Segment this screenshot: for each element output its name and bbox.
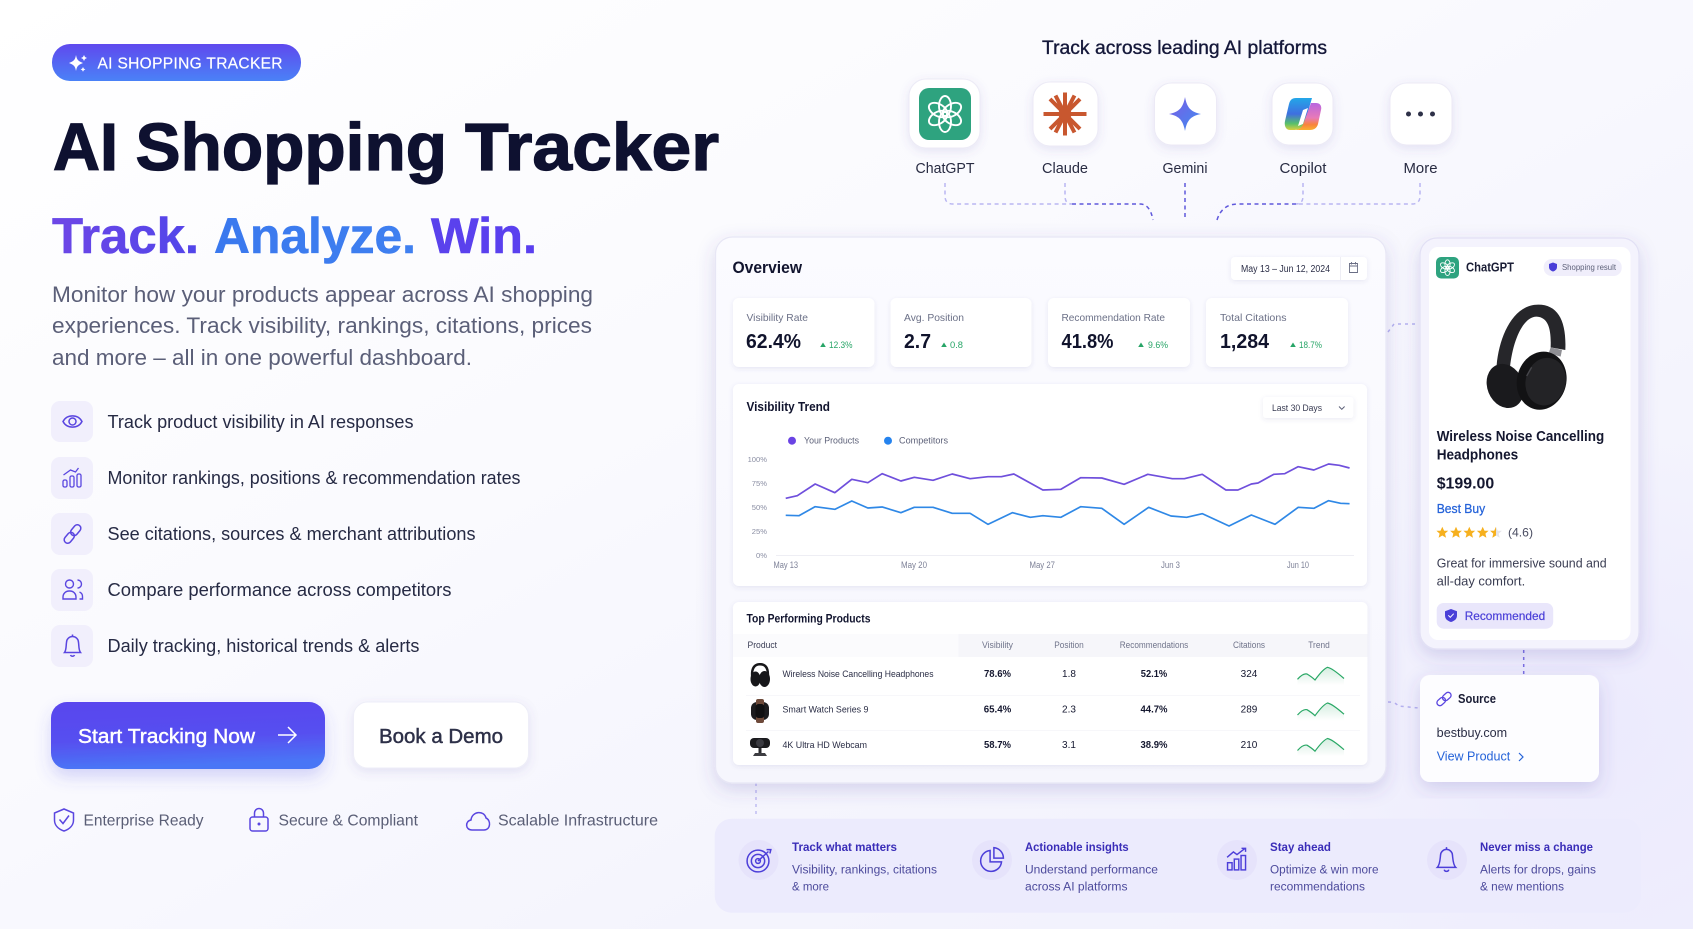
- subtitle: Track. Analyze. Win.: [52, 208, 537, 264]
- row: smart watch: 65.4%: [984, 705, 1011, 716]
- title: AI: [53, 110, 118, 185]
- icon: Gemini: [1154, 83, 1216, 177]
- button: start tracking now: [51, 702, 325, 769]
- KPI: recommendation rate: Recommendation Rate: [1062, 312, 1165, 324]
- icon: More: [1390, 83, 1452, 177]
- button: book a demo: [354, 702, 528, 768]
- badge: recommended: [1437, 603, 1553, 629]
- KPI: average position: 0.8: [950, 340, 963, 351]
- row: webcam: 4K Ultra HD Webcam: [782, 740, 867, 751]
- feature: visibility: [51, 401, 414, 442]
- icon: Gemini: Gemini: [1162, 161, 1208, 177]
- trust badges: [54, 808, 658, 831]
- table header: Trend: [1308, 640, 1330, 650]
- panel: product result card: [1420, 238, 1639, 649]
- feature: competitors: Compare performance across competitors: [108, 580, 452, 600]
- chart: visibility trend: [733, 384, 1367, 586]
- subtitle: Track. Analyze. Win.: Track.: [52, 208, 199, 264]
- arrow: platform connectors: [945, 183, 1420, 220]
- panel: source card: bestbuy.com: [1437, 726, 1507, 740]
- badge: shopping result: [1544, 259, 1622, 276]
- badge: secure and compliant: Secure & Compliant: [278, 812, 419, 830]
- icon: Claude: Claude: [1042, 161, 1088, 177]
- table header: Citations: [1233, 640, 1265, 650]
- panel: product result card: ChatGPT: [1466, 261, 1514, 275]
- panel: benefits band: [715, 819, 1641, 913]
- KPI: average position: 2.7: [904, 331, 931, 353]
- badge: recommended: Recommended: [1465, 609, 1545, 623]
- feature: rankings: Monitor rankings, positions & recommendation rates: [108, 468, 520, 488]
- row: webcam: 210: [1241, 740, 1258, 751]
- table header: Product: [748, 640, 777, 650]
- subtitle: Track. Analyze. Win.: Win.: [431, 208, 537, 264]
- panel: source card: [1420, 675, 1599, 782]
- subtitle: Track. Analyze. Win.: Analyze.: [214, 208, 416, 264]
- line: competitors: [786, 501, 1350, 526]
- feature: alerts: [51, 625, 420, 667]
- dropdown: last 30 days: Last 30 Days: [1272, 403, 1322, 414]
- KPI: total citations: Total Citations: [1220, 312, 1286, 324]
- KPI: total citations: 1,284: [1220, 331, 1270, 353]
- arrow: side connectors: [756, 324, 1524, 818]
- benefit: never miss a change: Never miss a change: [1480, 842, 1593, 854]
- table header: Position: [1054, 640, 1084, 650]
- row: headphones: Wireless Noise Cancelling Headphones: [782, 669, 934, 680]
- table: top performing products: Top Performing Products: [746, 614, 870, 626]
- row: headphones: 1.8: [1062, 669, 1076, 680]
- benefit: stay ahead: recommendations: [1270, 881, 1365, 893]
- benefit: track what matters: Visibility, rankings, citations: [792, 864, 937, 876]
- icon: link: [1436, 691, 1452, 707]
- KPI: visibility rate: [733, 298, 874, 367]
- panel: source card: Source: [1458, 692, 1496, 706]
- price: $199.00: [1437, 476, 1494, 493]
- button: book a demo: Book a Demo: [379, 726, 503, 748]
- feature: alerts: Daily tracking, historical trends & alerts: [108, 636, 420, 656]
- product description: all-day comfort.: [1437, 575, 1525, 589]
- title: Shopping: [136, 110, 447, 185]
- row: webcam: 3.1: [1062, 740, 1076, 751]
- line: your products: [786, 464, 1350, 498]
- product name: Headphones: [1437, 447, 1518, 463]
- table header: Visibility: [982, 640, 1013, 650]
- KPI: recommendation rate: 41.8%: [1062, 331, 1114, 353]
- feature: citations: [51, 513, 476, 555]
- row: smart watch: 2.3: [1062, 705, 1076, 716]
- table header: Recommendations: [1120, 640, 1189, 650]
- legend: Competitors: [899, 436, 948, 447]
- benefit: stay ahead: Optimize & win more: [1270, 864, 1378, 876]
- table header: [733, 634, 1368, 657]
- feature: citations: See citations, sources & merchant attributions: [108, 524, 476, 544]
- KPI: total citations: [1206, 298, 1348, 367]
- button: start tracking now: Start Tracking Now: [78, 726, 256, 748]
- KPI: visibility rate: 12.3%: [829, 340, 853, 351]
- badge: secure and compliant: [250, 808, 419, 831]
- badge: enterprise ready: [54, 809, 204, 831]
- badge: AI shopping tracker: [52, 44, 301, 81]
- date range picker: May 13 – Jun 12, 2024: [1241, 264, 1330, 275]
- product description: [1437, 556, 1607, 589]
- icon: ChatGPT: [909, 79, 980, 177]
- badge: AI shopping tracker: AI SHOPPING TRACKER: [98, 56, 282, 72]
- legend: [788, 436, 948, 447]
- y axis labels: 100%: [748, 455, 767, 464]
- icon: Copilot: [1272, 83, 1333, 177]
- intro paragraph: [52, 282, 593, 370]
- badge: enterprise ready: Enterprise Ready: [84, 812, 204, 830]
- x axis labels: [774, 560, 1309, 570]
- x axis labels: May 27: [1030, 560, 1055, 570]
- date range picker: [1231, 257, 1367, 280]
- KPI: visibility rate: Visibility Rate: [746, 312, 808, 324]
- KPI: total citations: 18.7%: [1299, 340, 1322, 351]
- star rating: (4.6): [1508, 526, 1533, 540]
- y axis labels: 25%: [752, 527, 767, 536]
- image: headphones: [1480, 305, 1573, 415]
- KPI: recommendation rate: [1048, 298, 1190, 367]
- benefit: actionable insights: [972, 840, 1158, 893]
- row: headphones: 78.6%: [984, 669, 1011, 680]
- row: smart watch: 44.7%: [1140, 705, 1168, 716]
- platform icons: [909, 79, 1452, 177]
- feature list: [51, 401, 520, 667]
- heading: platforms: Track across leading AI platforms: [1042, 38, 1327, 59]
- KPI: average position: [890, 298, 1032, 367]
- icon: ChatGPT: ChatGPT: [916, 161, 975, 177]
- merchant: Best Buy: [1437, 502, 1486, 516]
- y axis labels: 75%: [752, 479, 767, 488]
- star rating: [1436, 526, 1533, 540]
- benefit: actionable insights: across AI platforms: [1025, 881, 1128, 893]
- intro paragraph: and more – all in one powerful dashboard.: [52, 345, 472, 370]
- benefit: track what matters: Track what matters: [792, 842, 897, 854]
- KPI: visibility rate: 62.4%: [746, 331, 801, 353]
- panel: overview dashboard: [716, 237, 1386, 783]
- benefit: track what matters: & more: [792, 881, 829, 893]
- benefit: never miss a change: Alerts for drops, gains: [1480, 864, 1596, 876]
- table: top performing products: [733, 602, 1368, 765]
- KPI: recommendation rate: 9.6%: [1148, 340, 1169, 351]
- chart: visibility trend: Visibility Trend: [746, 399, 830, 414]
- product name: [1437, 429, 1604, 463]
- row: webcam: [750, 738, 1344, 756]
- icon: ChatGPT small: [1436, 257, 1459, 278]
- y axis labels: 0%: [756, 551, 767, 560]
- row: smart watch: [751, 699, 1344, 723]
- product description: Great for immersive sound and: [1437, 556, 1607, 570]
- x axis labels: Jun 10: [1287, 560, 1309, 570]
- benefit: track what matters: [738, 840, 937, 893]
- icon: Claude: [1033, 82, 1098, 177]
- title: [53, 110, 719, 185]
- benefit: never miss a change: [1427, 840, 1596, 893]
- legend: Your Products: [804, 436, 859, 447]
- row: webcam: 38.9%: [1140, 740, 1168, 751]
- benefit: actionable insights: Actionable insights: [1025, 842, 1129, 854]
- title: Tracker: [465, 110, 719, 185]
- x axis labels: Jun 3: [1161, 560, 1180, 570]
- x axis labels: May 20: [901, 560, 927, 570]
- x axis labels: May 13: [774, 560, 798, 570]
- badge: shopping result: Shopping result: [1562, 262, 1617, 272]
- row: smart watch: Smart Watch Series 9: [782, 705, 868, 716]
- KPI: average position: Avg. Position: [904, 312, 964, 324]
- intro paragraph: Monitor how your products appear across AI shopping: [52, 282, 593, 307]
- benefit: stay ahead: Stay ahead: [1270, 842, 1331, 854]
- heading: overview: Overview: [732, 258, 803, 277]
- benefit: stay ahead: [1217, 840, 1378, 893]
- row: webcam: 58.7%: [984, 740, 1011, 751]
- dropdown: last 30 days: [1263, 397, 1354, 418]
- icon: Copilot: Copilot: [1280, 161, 1326, 177]
- icon: More: More: [1404, 161, 1438, 177]
- feature: visibility: Track product visibility in AI responses: [108, 412, 414, 432]
- y axis labels: [748, 455, 767, 560]
- benefit: actionable insights: Understand performance: [1025, 864, 1158, 876]
- y axis labels: 50%: [752, 503, 767, 512]
- row: smart watch: 289: [1241, 705, 1258, 716]
- benefit: never miss a change: & new mentions: [1480, 881, 1564, 893]
- intro paragraph: experiences. Track visibility, rankings, citations, prices: [52, 313, 592, 338]
- feature: competitors: [51, 569, 452, 611]
- panel: source card: View Product: [1437, 750, 1511, 764]
- feature: rankings: [51, 457, 520, 499]
- row: headphones: [750, 663, 1344, 687]
- row: headphones: 324: [1241, 669, 1258, 680]
- product name: Wireless Noise Cancelling: [1437, 429, 1604, 445]
- row: headphones: 52.1%: [1141, 669, 1167, 680]
- badge: scalable infrastructure: Scalable Infrastructure: [498, 812, 658, 830]
